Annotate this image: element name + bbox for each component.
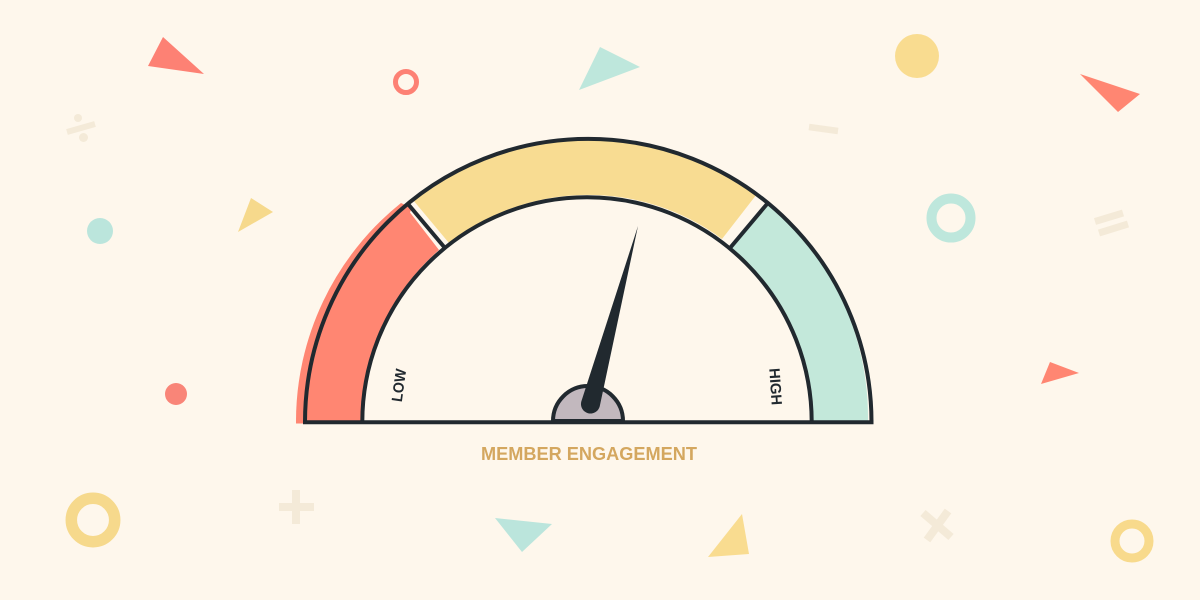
red triangle top left — [148, 37, 204, 74]
teal triangle bottom — [495, 518, 552, 552]
HIGH label: HIGH — [765, 368, 785, 406]
red dot left — [165, 383, 187, 405]
teal triangle top — [579, 47, 640, 90]
yellow triangle left — [238, 198, 273, 232]
yellow triangle bottom — [708, 514, 749, 557]
divide symbol — [67, 114, 95, 142]
gauge — [296, 139, 874, 424]
gauge outline — [303, 139, 874, 422]
yellow circle top right — [895, 34, 939, 78]
red triangle top right — [1080, 74, 1140, 112]
yellow ring bottom left — [71, 498, 115, 542]
red low segment with offset shadow — [296, 203, 439, 424]
gauge caption: MEMBER ENGAGEMENT — [481, 444, 697, 464]
LOW label: LOW — [389, 367, 410, 403]
red ring top — [396, 72, 416, 92]
plus symbol — [279, 490, 314, 524]
red triangle small right — [1041, 362, 1079, 384]
teal high segment — [731, 202, 868, 422]
needle — [581, 226, 638, 414]
minus symbol — [809, 127, 838, 131]
yellow middle segment — [413, 139, 757, 243]
equals symbol — [1095, 213, 1128, 233]
decorative shapes: triangles, circles and rings — [71, 34, 1149, 558]
times symbol — [923, 511, 951, 540]
teal ring right — [932, 198, 970, 238]
needle hub — [553, 386, 623, 421]
teal dot left — [87, 218, 113, 244]
faint math symbols — [67, 114, 1128, 540]
yellow ring bottom right — [1115, 524, 1149, 558]
